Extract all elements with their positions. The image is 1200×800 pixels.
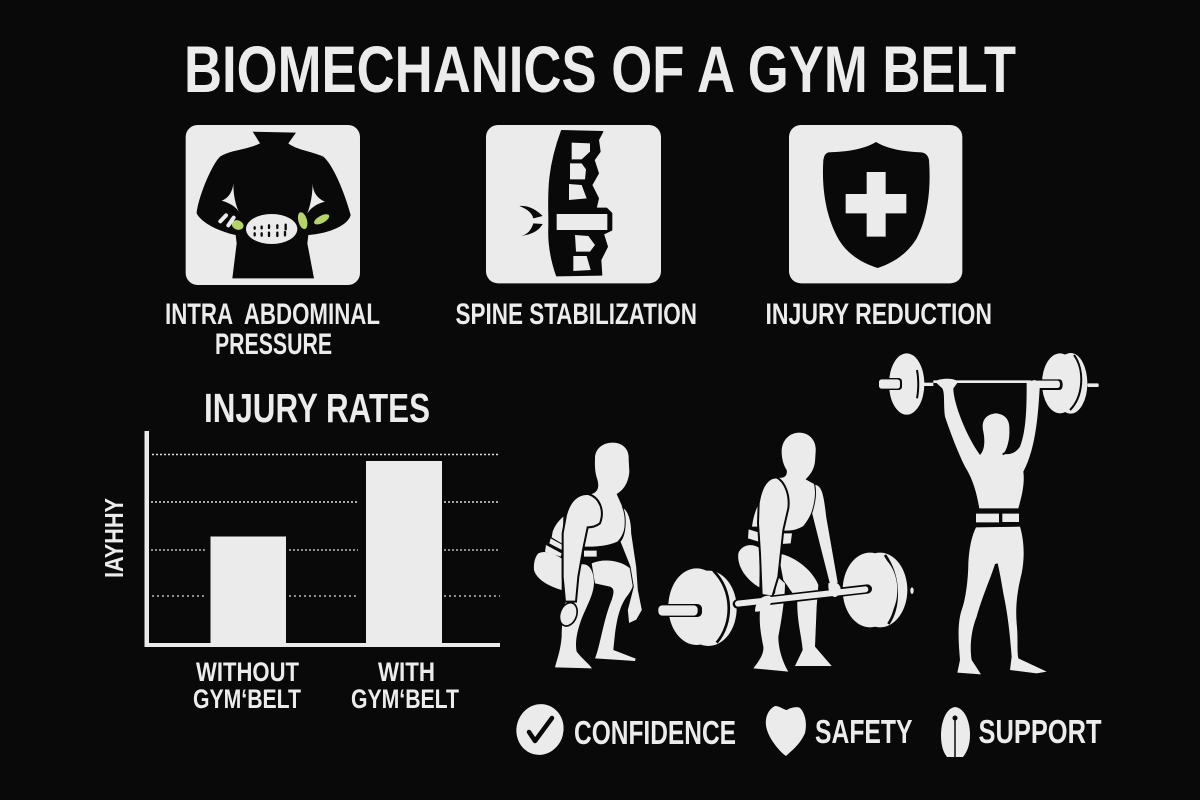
legs xyxy=(957,527,1047,674)
barbell right plates xyxy=(843,553,914,627)
y axis label: IAYHHY xyxy=(99,498,129,578)
bar label: with gym belt: GYM‘BELT xyxy=(351,684,459,714)
lifter body xyxy=(935,379,1040,508)
label: confidence: CONFIDENCE xyxy=(574,714,736,751)
bar label: without gym belt: WITHOUT xyxy=(196,657,299,687)
label: intra abdominal pressure xyxy=(165,298,380,361)
icon: heart shield xyxy=(766,706,806,756)
label: safety: SAFETY xyxy=(815,713,912,750)
legend: support xyxy=(941,707,1102,757)
title: BIOMECHANICS OF A GYM BELT xyxy=(184,32,1016,106)
label: injury reduction: INJURY REDUCTION xyxy=(766,298,992,331)
bar label: with gym belt xyxy=(351,657,459,714)
figure: squat xyxy=(534,443,642,668)
icon: check mark xyxy=(511,699,569,760)
legend: confidence xyxy=(511,699,736,760)
chart heading: INJURY RATES xyxy=(204,385,430,431)
panel: injury reduction xyxy=(766,125,992,331)
label: spine stabilization: SPINE STABILIZATION xyxy=(456,298,697,331)
barbell left plates xyxy=(657,568,737,646)
barbell bar xyxy=(737,582,867,612)
bar label: without gym belt: GYM‘BELT xyxy=(193,684,301,714)
panel: injury rates chart xyxy=(99,385,500,714)
bar label: without gym belt xyxy=(193,657,301,714)
lifter body xyxy=(738,433,838,672)
icon: support xyxy=(941,707,970,757)
panel: spine stabilization xyxy=(456,125,697,331)
barbell overhead xyxy=(878,353,1099,415)
bar label: with gym belt: WITH xyxy=(378,657,435,687)
icon: shield with cross xyxy=(789,125,962,283)
panel: intra abdominal pressure xyxy=(165,125,380,361)
bar chart xyxy=(144,431,500,647)
icon: torso with belt pressure xyxy=(186,125,360,285)
icon: spine with belt xyxy=(486,125,661,283)
label: support: SUPPORT xyxy=(978,713,1102,750)
figure: overhead press xyxy=(878,353,1099,674)
label: intra abdominal pressure: INTRA ABDOMINAL xyxy=(165,298,380,331)
label: intra abdominal pressure: PRESSURE xyxy=(215,328,332,361)
legend: safety xyxy=(766,706,912,756)
figure: deadlift with barbell xyxy=(657,433,914,672)
belt xyxy=(976,514,1019,522)
